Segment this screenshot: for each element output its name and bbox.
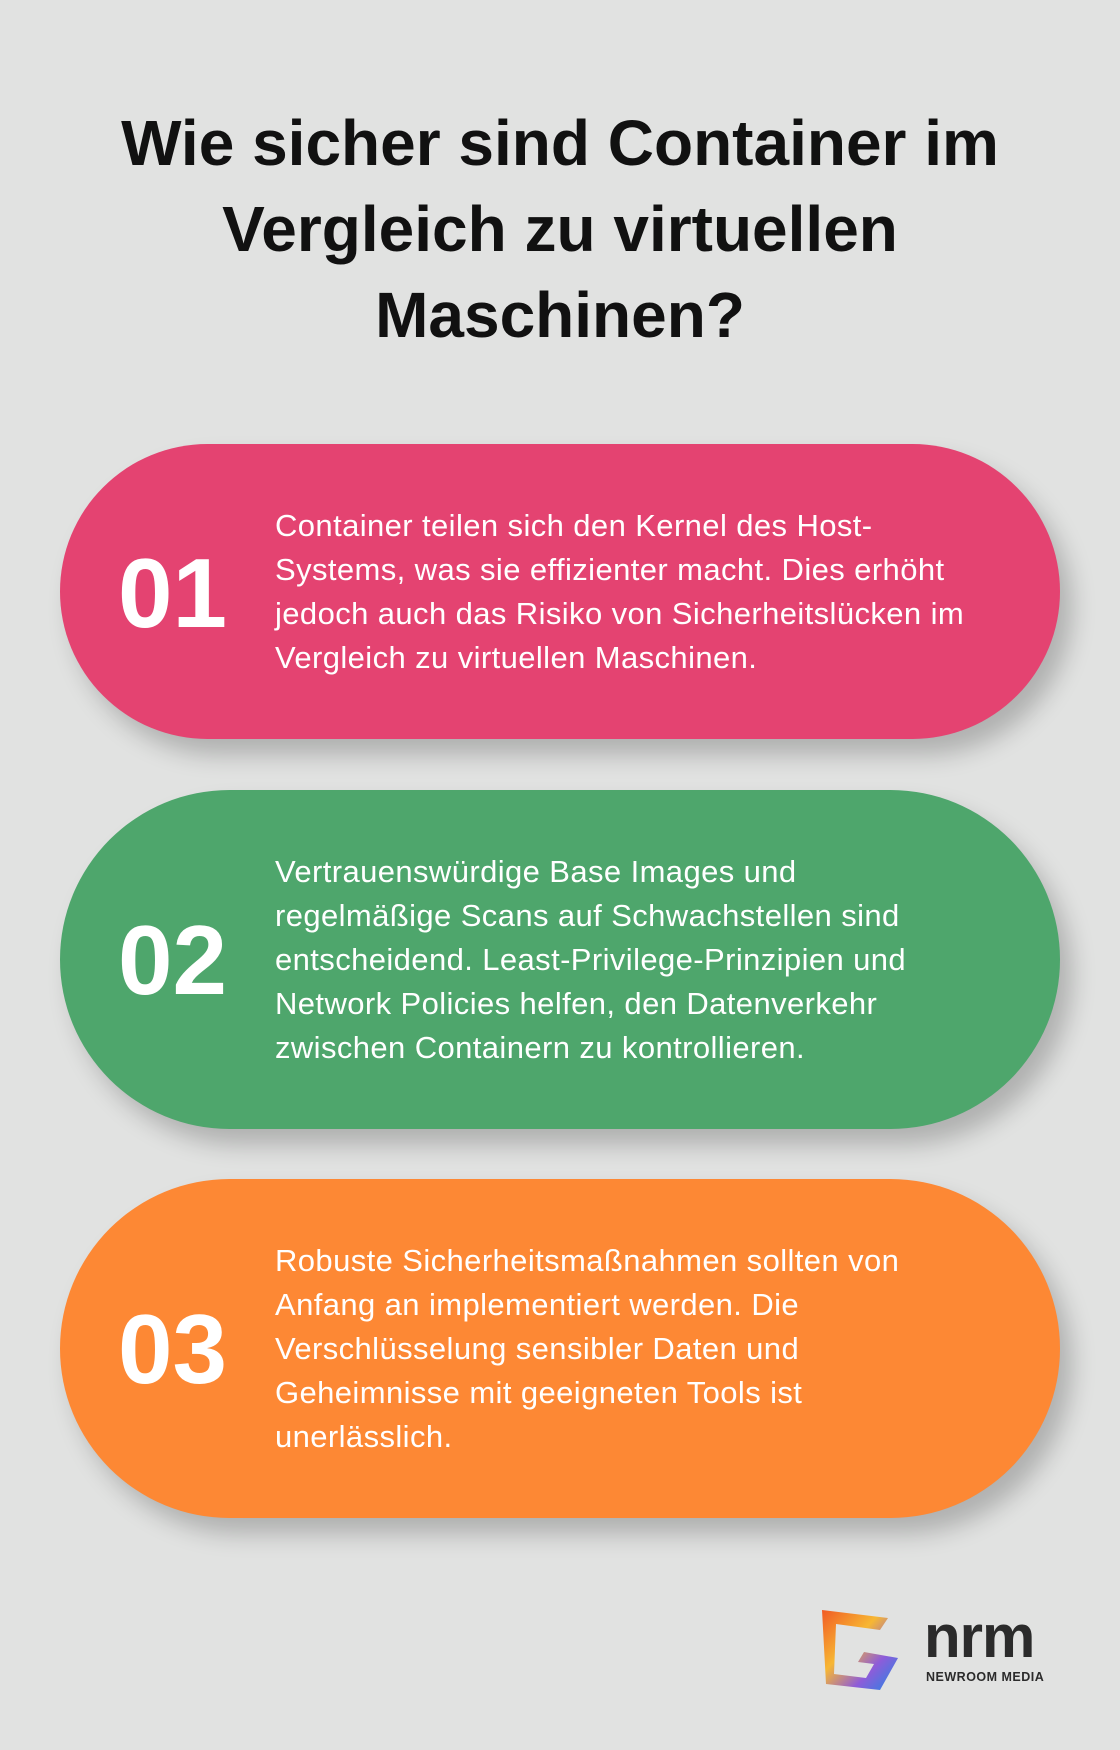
text 03: unerlässlich.: [275, 1419, 453, 1454]
text 01: jedoch auch das Risiko von Sicherheitslücken im: [275, 596, 964, 631]
text 03: Verschlüsselung sensibler Daten und: [275, 1331, 799, 1366]
panel: 01: [60, 444, 1060, 739]
text 03: Geheimnisse mit geeigneten Tools ist: [275, 1375, 802, 1410]
text 02: zwischen Containern zu kontrollieren.: [275, 1030, 805, 1065]
text 03: Robuste Sicherheitsmaßnahmen sollten von: [275, 1243, 899, 1278]
text 02: Network Policies helfen, den Datenverkehr: [275, 986, 877, 1021]
text 01: Container teilen sich den Kernel des Host-: [275, 508, 873, 543]
number 01: 01: [118, 538, 227, 648]
icon: logo mark: [822, 1610, 898, 1690]
logo: [822, 1603, 1044, 1690]
text 02: entscheidend. Least-Privilege-Prinzipien und: [275, 942, 906, 977]
text 03: Anfang an implementiert werden. Die: [275, 1287, 799, 1322]
logo subtitle: NEWROOM MEDIA: [926, 1670, 1044, 1684]
text 02: regelmäßige Scans auf Schwachstellen sind: [275, 898, 900, 933]
number 02: 02: [118, 905, 227, 1015]
number 03: 03: [118, 1294, 227, 1404]
text 01: Vergleich zu virtuellen Maschinen.: [275, 640, 757, 675]
panel: 02: [60, 790, 1060, 1129]
text 03: [275, 1243, 899, 1454]
text 01: [274, 508, 964, 675]
title: Wie sicher sind Container im Vergleich zu virtuellen Maschinen?: [121, 107, 999, 351]
logo text: nrm: [924, 1603, 1034, 1670]
text 01: Systems, was sie effizienter macht. Dies erhöht: [275, 552, 944, 587]
text 02: Vertrauenswürdige Base Images und: [275, 854, 797, 889]
panel: 03: [60, 1179, 1060, 1518]
text 02: [275, 854, 906, 1065]
